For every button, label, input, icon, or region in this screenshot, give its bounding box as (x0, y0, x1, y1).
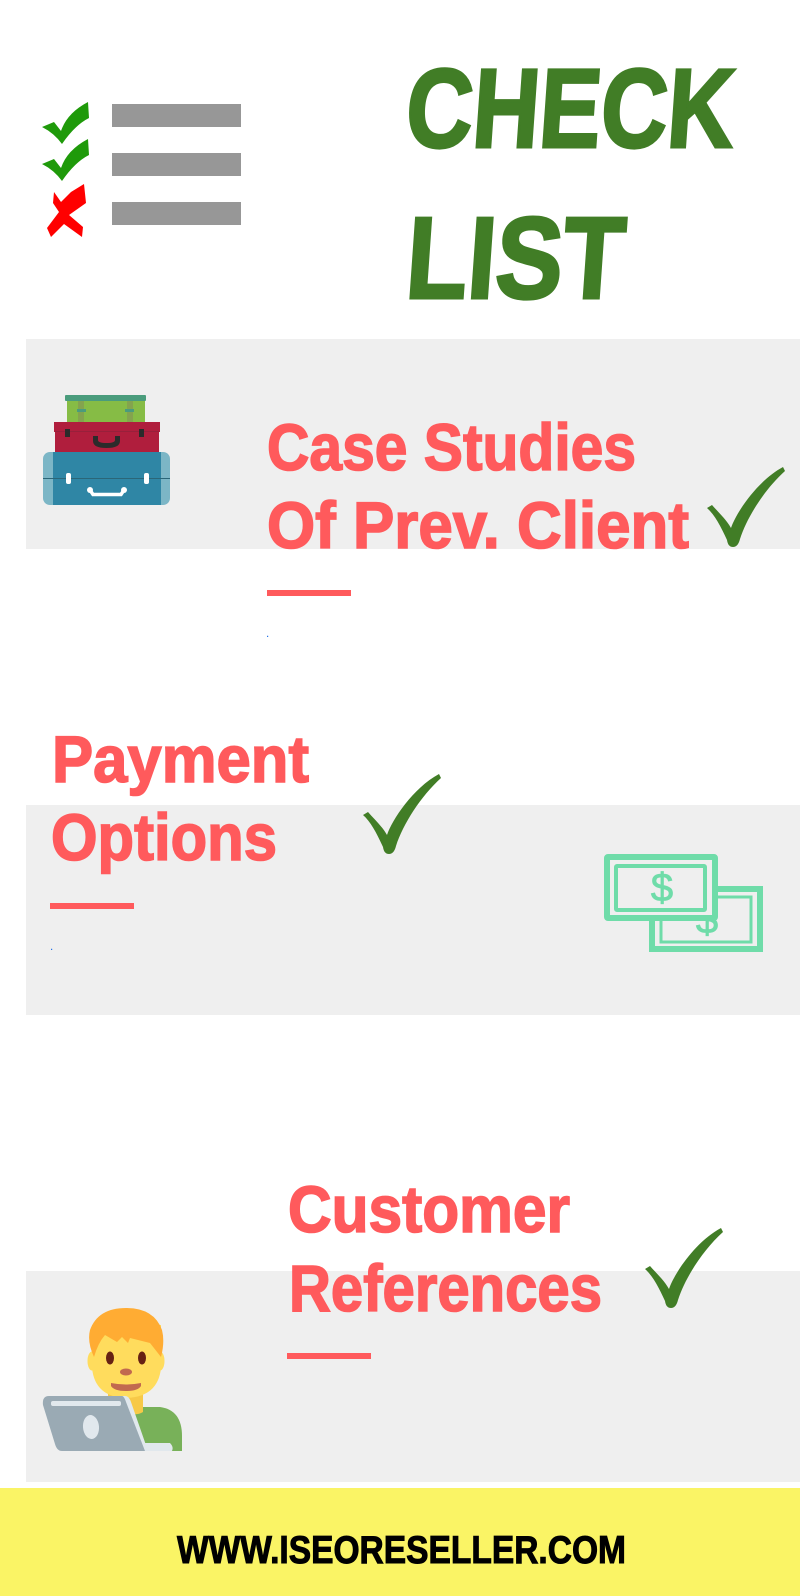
icon: person with laptop (43, 1308, 182, 1451)
panel: payment options background (26, 805, 800, 1015)
heading: payment options: Options (51, 800, 277, 874)
heading: case studies of prev. client (267, 410, 689, 562)
heading: customer references (288, 1172, 602, 1325)
accent bar: payment options (50, 903, 134, 909)
accent bar: customer references (287, 1353, 371, 1359)
heading: customer references: Customer (288, 1172, 570, 1246)
heading: payment options: Payment (52, 722, 309, 796)
title: check list (402, 45, 739, 323)
title: check list: CHECK (402, 45, 739, 171)
heading: case studies of prev. client: Case Studies (267, 410, 636, 484)
panel: customer references background (26, 1271, 800, 1482)
panel: case studies background (26, 339, 800, 549)
check mark: case studies (707, 467, 785, 547)
footer band (0, 1488, 800, 1596)
icon: banknotes (607, 857, 760, 949)
heading: customer references: References (289, 1251, 602, 1325)
icon: stacked suitcases (43, 395, 170, 505)
check mark: payment options (363, 774, 441, 854)
accent bar: case studies (267, 590, 351, 596)
icon: banknotes: $ (696, 898, 718, 942)
footer url: WWW.ISEORESELLER.COM (177, 1529, 626, 1572)
heading: payment options (51, 722, 309, 874)
title: check list: LIST (402, 193, 629, 323)
dot: payment options: . (50, 943, 53, 952)
icon: checklist (42, 102, 241, 237)
dot: case studies: . (266, 630, 269, 639)
check mark: customer references (645, 1228, 723, 1308)
heading: case studies of prev. client: Of Prev. Client (267, 488, 689, 562)
icon: banknotes: $ (651, 866, 673, 910)
